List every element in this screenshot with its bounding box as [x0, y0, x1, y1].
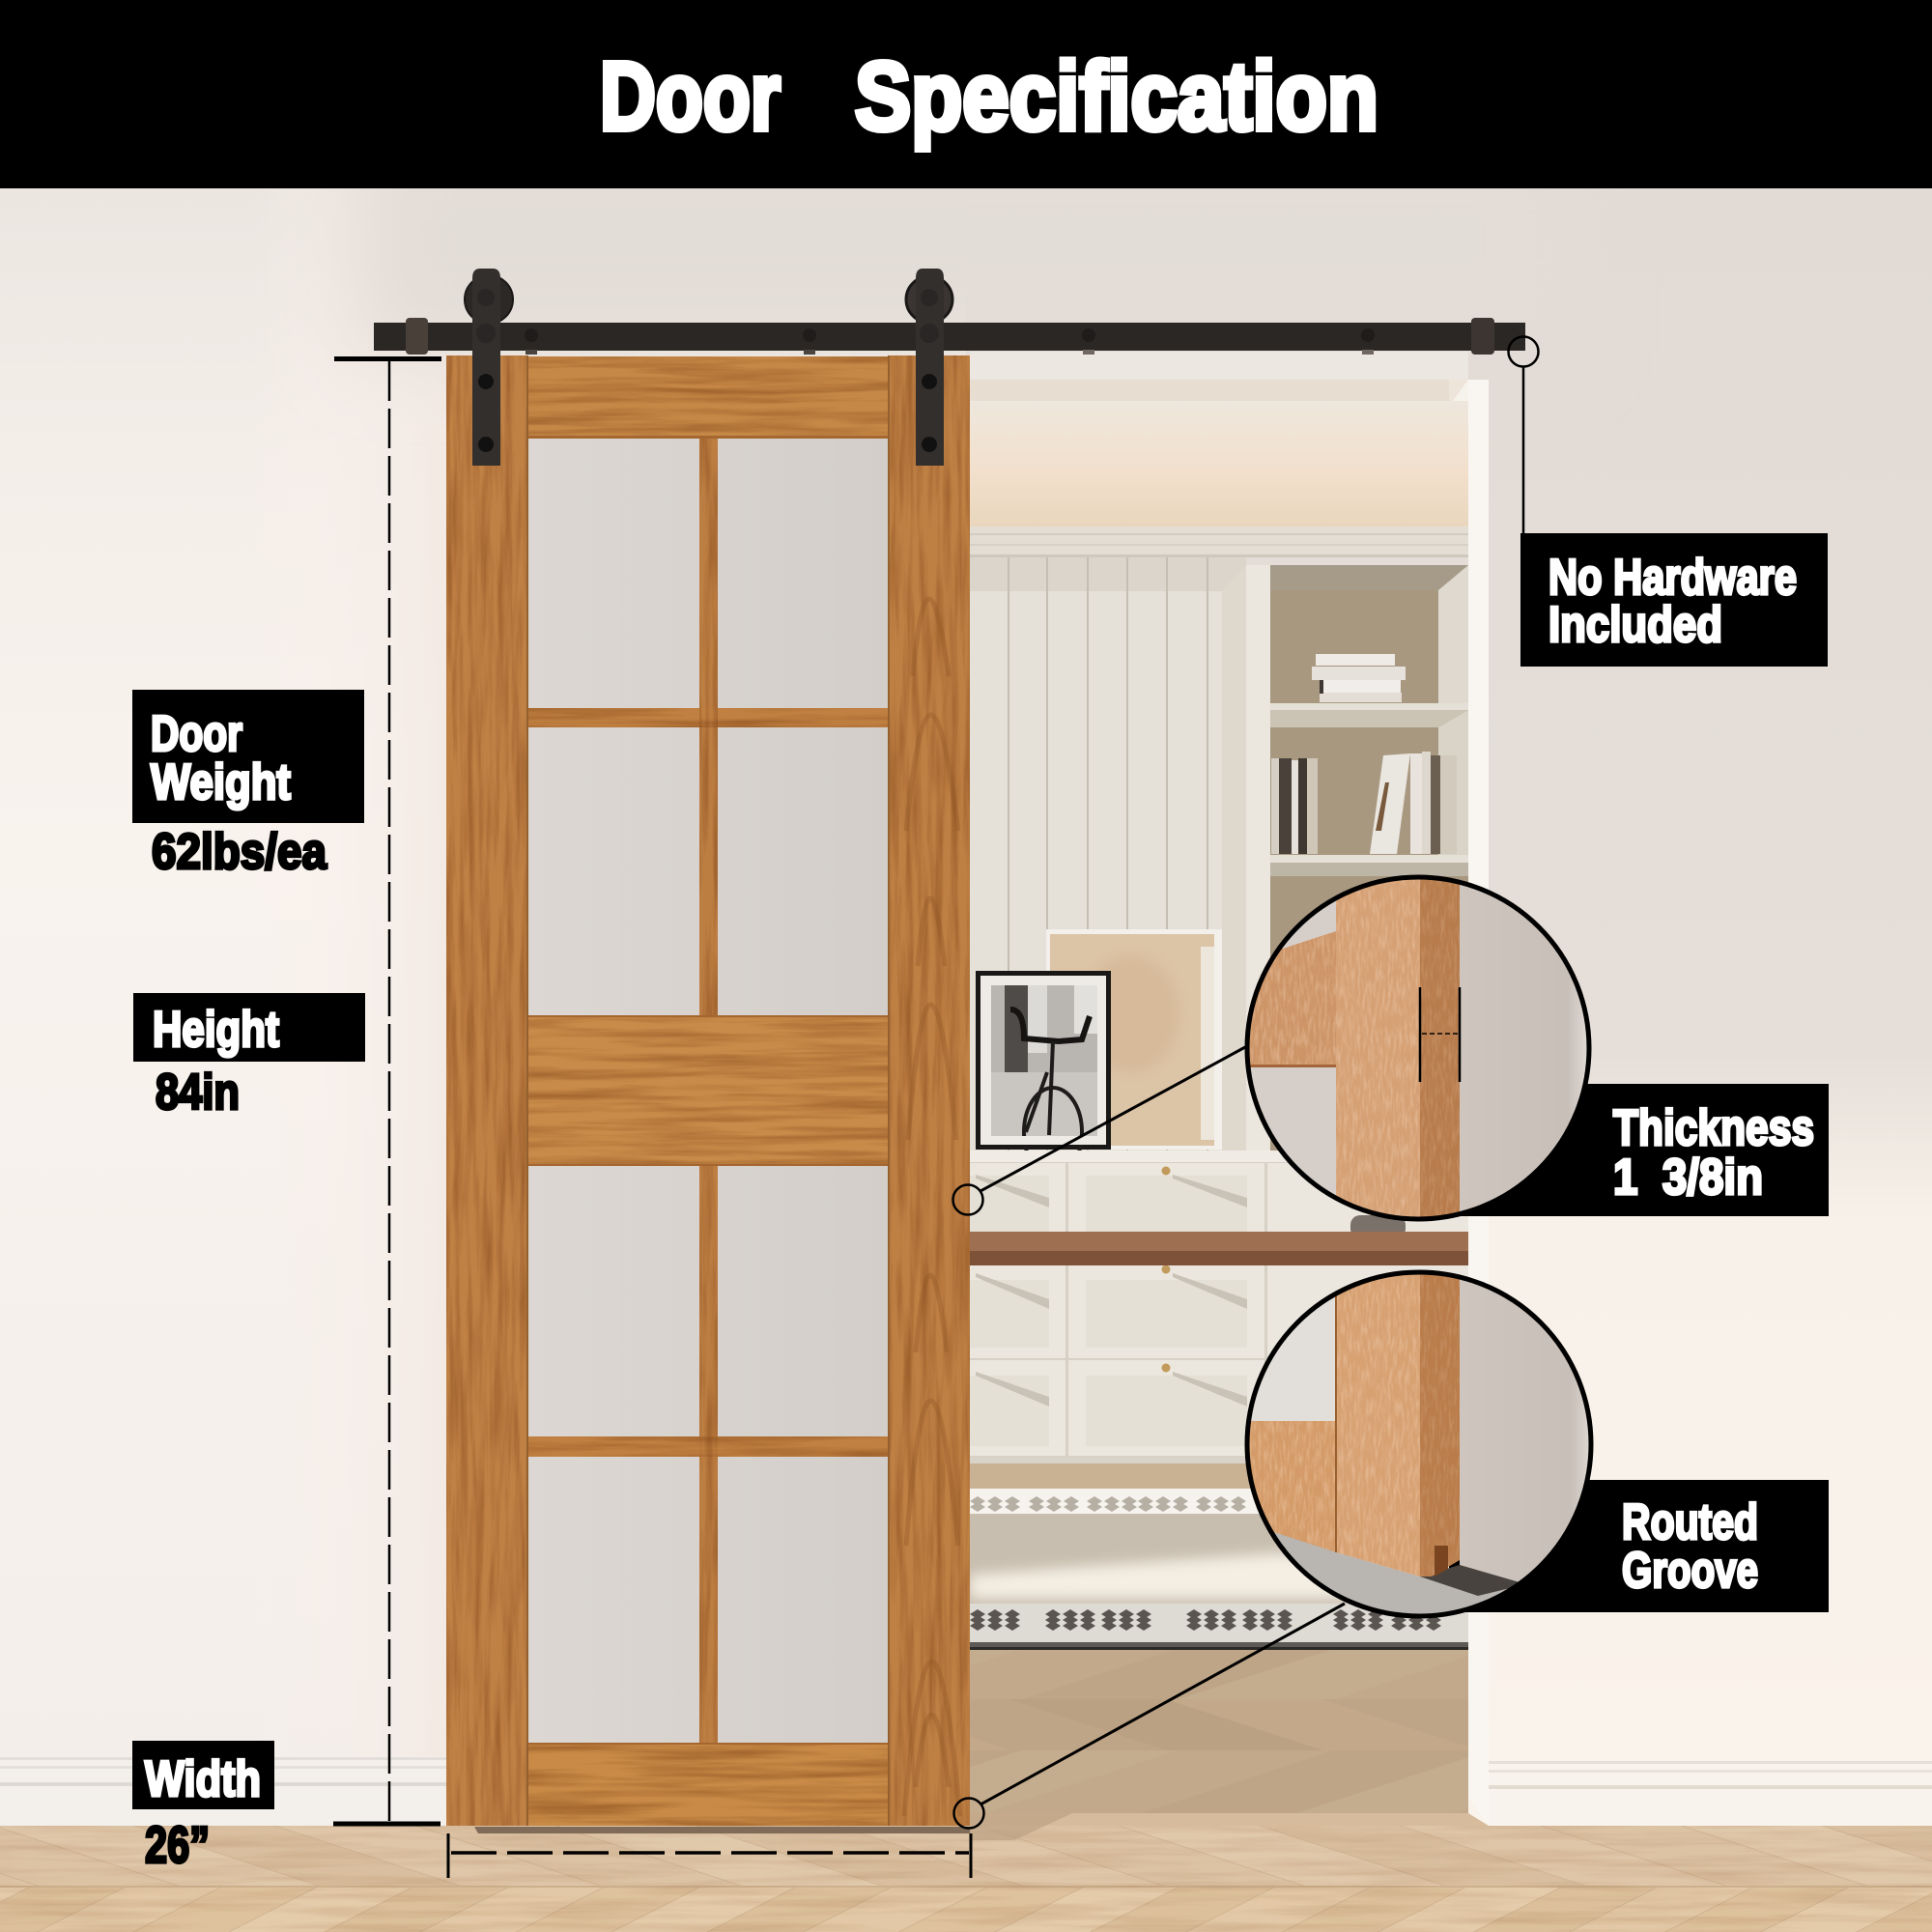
- title: Door: [600, 43, 781, 151]
- detail circle: routed groove: [1241, 1265, 1600, 1623]
- label: width: Width: [145, 1751, 261, 1807]
- framed bicycle photo: [976, 971, 1111, 1177]
- ceiling: [970, 401, 1468, 526]
- width dimension line: [448, 1833, 971, 1878]
- label: routed groove: Groove: [1622, 1543, 1758, 1599]
- label: width: 26”: [145, 1816, 210, 1874]
- label: no hardware included with leader: No Hardware: [1548, 550, 1797, 606]
- detail circle: thickness: [1241, 871, 1595, 1229]
- label: height: 84in: [156, 1065, 240, 1121]
- left stile: [446, 355, 528, 1826]
- floor: herringbone planks: [0, 1826, 1932, 1932]
- thickness measure mark: [1420, 987, 1460, 1082]
- door jamb: [1449, 380, 1489, 1826]
- barn door: [446, 355, 970, 1826]
- rug: [970, 1457, 1468, 1650]
- height dimension line: [333, 359, 441, 1824]
- interior floor: [970, 1650, 1489, 1840]
- leader: door edge to thickness detail: [952, 1047, 1245, 1215]
- baseboard: [0, 1756, 1932, 1826]
- frosted glass: [527, 439, 889, 1745]
- label: door weight: Weight: [151, 754, 291, 810]
- barn door rail and hardware: [374, 269, 1525, 466]
- track stops: [406, 318, 428, 355]
- label: width: [132, 1741, 274, 1874]
- canvas art: [1046, 929, 1222, 1150]
- soffit: [970, 380, 1468, 401]
- label: thickness: Thickness: [1613, 1100, 1814, 1156]
- title bar: [0, 0, 1932, 188]
- grey stool: [1350, 1215, 1406, 1238]
- label: no hardware included with leader: Included: [1548, 597, 1722, 653]
- wood table top: [970, 1232, 1468, 1265]
- label: height: Height: [153, 1002, 279, 1058]
- left hanger: [465, 269, 513, 466]
- label: thickness: [1449, 1084, 1829, 1216]
- label: thickness: 1 3/8in: [1613, 1150, 1763, 1206]
- books stack: [1312, 654, 1406, 702]
- label: routed groove: Routed: [1622, 1494, 1758, 1550]
- track rail: [374, 323, 1525, 351]
- label: height: [133, 993, 365, 1121]
- door shadow on floor: [474, 1827, 970, 1833]
- right stile: [888, 355, 970, 1826]
- muntins: [527, 439, 889, 1745]
- label: no hardware included with leader: [1509, 336, 1828, 667]
- leader: door bottom to routed groove detail: [954, 1604, 1345, 1828]
- top rail: [528, 356, 888, 439]
- label: door weight: [132, 690, 364, 880]
- title: Specification: [855, 43, 1378, 151]
- books upright: [1271, 752, 1457, 854]
- cabinets: [970, 1151, 1468, 1457]
- bookcase: [1246, 565, 1468, 1154]
- panelled wall: [970, 557, 1246, 1166]
- middle rail: [528, 1015, 888, 1166]
- label: routed groove: [1449, 1480, 1829, 1612]
- bottom rail: [528, 1743, 888, 1826]
- right hanger: [906, 269, 952, 466]
- track bolts: [525, 328, 1375, 355]
- interior room seen through opening: [970, 380, 1489, 1840]
- title: [600, 43, 1378, 151]
- crown moulding: [970, 526, 1468, 557]
- label: door weight: Door: [151, 706, 242, 762]
- label: door weight: 62lbs/ea: [152, 824, 327, 880]
